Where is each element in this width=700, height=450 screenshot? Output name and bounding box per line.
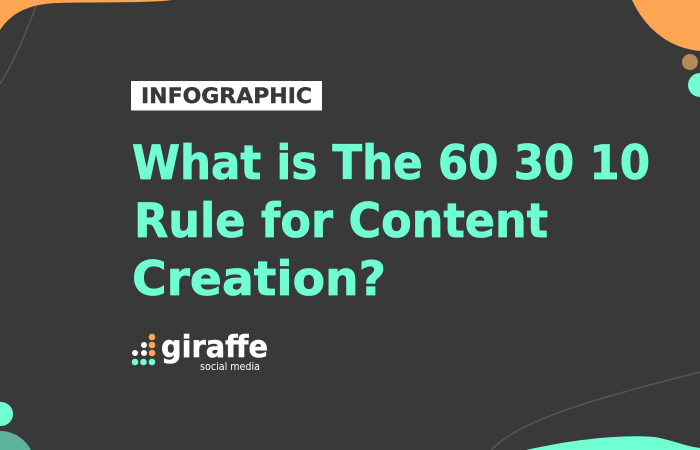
label: infographic tag: INFOGRAPHIC (141, 84, 312, 108)
curved line bottom right (491, 372, 700, 450)
dot: muted orange (682, 54, 698, 70)
logo wordmark: giraffe (161, 330, 268, 365)
curved line top left (0, 6, 36, 84)
dot: mint right (688, 73, 700, 97)
blob: mint bottom right (526, 436, 700, 450)
logo dots icon (132, 334, 155, 365)
title: Rule for Content (134, 194, 548, 249)
title: Creation? (132, 252, 386, 307)
title (132, 136, 650, 307)
dot: mint bottom left (0, 402, 13, 426)
logo: giraffe social media (132, 330, 268, 373)
title: What is The 60 30 10 (132, 136, 650, 191)
blob: muted teal bottom left (0, 431, 31, 450)
blob: orange top left (0, 0, 172, 30)
blob: orange top right (632, 0, 700, 51)
logo tagline: social media (200, 361, 260, 373)
label: infographic tag (131, 81, 322, 110)
